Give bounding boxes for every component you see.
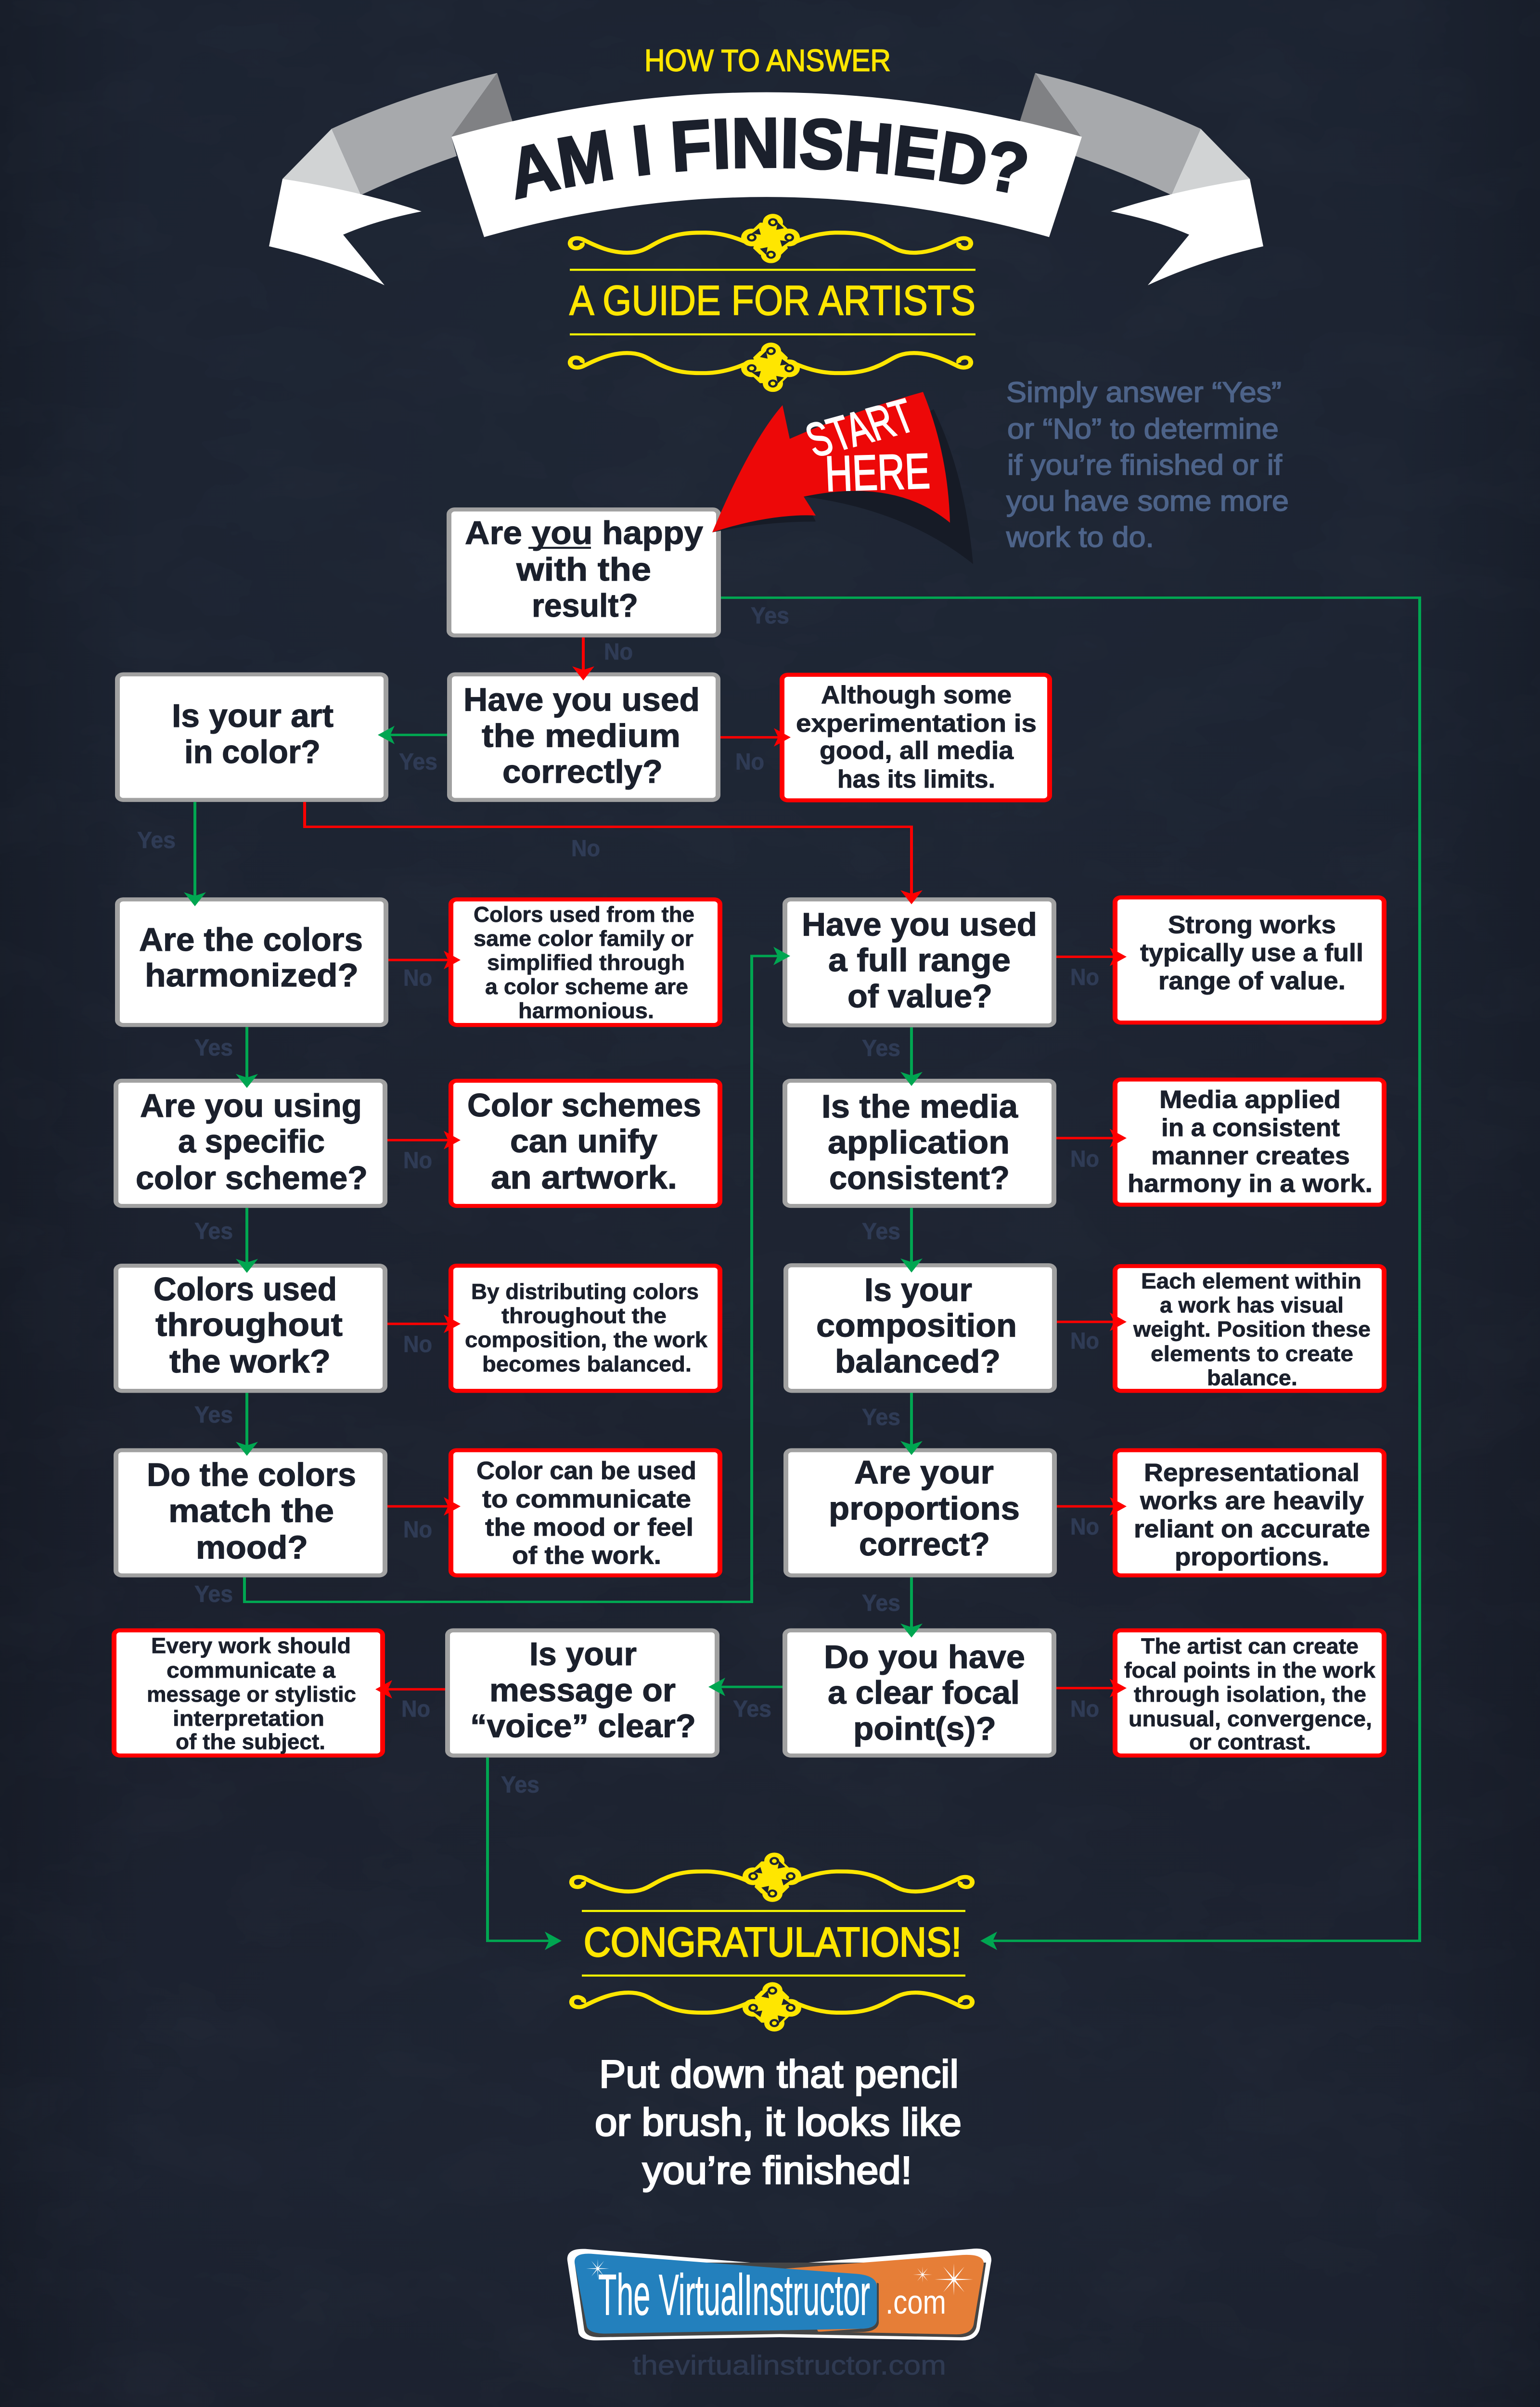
advice: media limits: Although some (821, 681, 1012, 709)
question: message or voice: Is your (529, 1636, 637, 1672)
question: composition balanced: composition (816, 1307, 1017, 1344)
question: match the mood: mood? (196, 1529, 308, 1566)
question: media application: consistent? (829, 1160, 1010, 1196)
logo suffix: .com (886, 2283, 946, 2321)
ornament: title top (570, 214, 971, 263)
question: specific color scheme (116, 1081, 385, 1206)
advice: representational: proportions. (1175, 1543, 1329, 1571)
question: specific color scheme: a specific (178, 1124, 325, 1160)
advice: focal points: The artist can create (1141, 1634, 1359, 1658)
yes and no branch labels: No (1070, 1328, 1099, 1354)
question: match the mood: Do the colors (147, 1457, 356, 1493)
question: composition balanced: balanced? (835, 1343, 1001, 1379)
arrow: value yes (900, 1027, 923, 1086)
closing message: or brush, it looks like (595, 2100, 962, 2144)
question: colors harmonized: Are the colors (139, 921, 363, 958)
advice: color schemes (451, 1081, 720, 1206)
question: full range of value: Have you used (802, 906, 1037, 943)
arrow: color yes to harmonized (184, 802, 206, 906)
ornament: congratulations bottom (572, 1982, 972, 2032)
arrow: throughout yes (236, 1393, 258, 1456)
advice: mood (451, 1450, 720, 1575)
advice: mood: to communicate (482, 1485, 691, 1513)
ribbon: right tail (1020, 73, 1263, 285)
question: colors throughout (116, 1266, 385, 1391)
arrow: voice no (375, 1680, 445, 1698)
arrow: value no (1056, 947, 1127, 966)
yes and no branch labels: No (735, 749, 764, 775)
advice: media applied: in a consistent (1161, 1114, 1340, 1142)
question: match the mood: match the (168, 1493, 334, 1529)
question: composition balanced (786, 1265, 1054, 1391)
heading: how to answer: HOW TO ANSWER (644, 43, 891, 78)
advice: visual weight: a work has visual (1160, 1293, 1344, 1318)
advice: color schemes: Color schemes (467, 1087, 701, 1124)
logo: the virtual instructor (567, 2249, 991, 2341)
yes and no branch labels: No (403, 965, 432, 991)
advice: distributing colors: throughout the (501, 1304, 667, 1328)
question: proportions (786, 1450, 1054, 1575)
question: happy with result: Are you happy (465, 515, 704, 551)
arrow: harmonized no (388, 951, 461, 969)
arrow: scheme yes (236, 1208, 258, 1273)
yes and no branch labels: Yes (751, 603, 789, 629)
question: focal points: point(s)? (853, 1711, 996, 1747)
advice: color family: same color family or (474, 926, 693, 951)
yes and no branch labels: No (403, 1517, 432, 1542)
advice: color family: simplified through (487, 950, 685, 975)
yes and no branch labels: No (401, 1696, 430, 1722)
congratulations heading with rules (582, 1910, 965, 1977)
yes and no branch labels: Yes (194, 1218, 233, 1244)
arrow: proportions no (1057, 1497, 1127, 1515)
title: AM I FINISHED? (515, 117, 1027, 200)
question: focal points: a clear focal (828, 1675, 1020, 1711)
arrow: focal yes to voice (708, 1678, 783, 1696)
yes and no branch labels: Yes (862, 1219, 900, 1244)
arrow: medium no to advice (720, 728, 791, 747)
advice: message (114, 1631, 383, 1756)
yes and no branch labels: Yes (399, 749, 437, 775)
arrow: composition no (1057, 1313, 1127, 1331)
advice: representational: Representational (1144, 1459, 1360, 1487)
question: art in color (117, 674, 386, 800)
question: proportions: correct? (859, 1526, 990, 1562)
yes and no branch labels: No (1070, 1514, 1099, 1540)
question: match the mood (116, 1450, 385, 1575)
yes and no branch labels: Yes (862, 1035, 900, 1061)
advice: message: Every work should (151, 1633, 351, 1658)
question: colors harmonized (117, 899, 386, 1025)
question: full range of value: a full range (828, 942, 1011, 978)
advice: distributing colors: composition, the work (465, 1328, 707, 1352)
advice: message: interpretation (173, 1706, 324, 1731)
yes and no branch labels: No (403, 1332, 432, 1357)
advice: strong works (1115, 897, 1384, 1022)
closing message: Put down that pencil (599, 2052, 959, 2096)
arrow: scheme no (387, 1131, 461, 1150)
arrow: media yes (900, 1208, 923, 1272)
yes and no branch labels: No (1070, 1146, 1099, 1172)
advice: media limits (782, 675, 1050, 800)
logo: the virtual instructor: The VirtualInstructor (598, 2263, 870, 2328)
question: proportions: proportions (829, 1490, 1020, 1527)
question: medium correctly: correctly? (502, 753, 663, 789)
question: medium correctly: Have you used (463, 682, 700, 718)
yes and no branch labels: Yes (194, 1035, 233, 1061)
advice: color schemes: an artwork. (491, 1160, 677, 1196)
yes and no branch labels: No (1070, 1696, 1099, 1722)
instructions text: Simply answer “Yes” (1006, 376, 1282, 408)
ornament: congratulations top (572, 1852, 972, 1902)
question: proportions: Are your (854, 1454, 994, 1490)
advice: message: communicate a (167, 1658, 335, 1682)
arrow: voice yes to congratulations (488, 1758, 562, 1950)
question: happy with result (449, 509, 719, 635)
arrow: color no to full range (305, 802, 923, 904)
advice: representational (1115, 1450, 1384, 1575)
ornament: title bottom (570, 343, 971, 392)
advice: focal points: focal points in the work (1124, 1658, 1375, 1682)
advice: distributing colors (451, 1266, 720, 1391)
question: medium correctly (449, 674, 718, 800)
advice: representational: works are heavily (1140, 1487, 1364, 1515)
arrow: mood no (387, 1497, 461, 1515)
arrow: happy no to medium (572, 637, 594, 680)
ribbon: centre band (451, 92, 1082, 237)
question: message or voice: “voice” clear? (470, 1708, 696, 1744)
yes and no branch labels: Yes (733, 1696, 771, 1722)
arrow: focal no (1056, 1679, 1127, 1697)
label: start: START (798, 389, 922, 467)
advice: visual weight: weight. Position these (1133, 1317, 1371, 1342)
ribbon: left tail (269, 73, 513, 285)
advice: message: of the subject. (176, 1730, 325, 1754)
website url: thevirtualinstructor.com (632, 2350, 946, 2381)
advice: focal points (1115, 1631, 1384, 1756)
yes and no branch labels (137, 603, 1099, 1798)
question: art in color: Is your art (172, 698, 334, 734)
question: full range of value (785, 899, 1054, 1025)
advice: focal points: through isolation, the (1134, 1682, 1366, 1707)
question: message or voice (448, 1631, 717, 1756)
question: colors harmonized: harmonized? (145, 958, 359, 994)
advice: color family: Colors used from the (474, 902, 694, 927)
yes and no branch labels: Yes (501, 1772, 539, 1798)
instructions text: work to do. (1006, 521, 1154, 553)
arrow: media no (1056, 1129, 1127, 1147)
advice: color schemes: can unify (510, 1123, 657, 1159)
instructions text: if you’re finished or if (1007, 449, 1283, 481)
advice: color family: a color scheme are (485, 974, 688, 999)
question: focal points (785, 1631, 1054, 1756)
advice: visual weight (1115, 1266, 1384, 1391)
arrow: mood yes to full range (244, 947, 790, 1602)
question: specific color scheme: Are you using (140, 1087, 362, 1124)
question: media application: application (828, 1124, 1010, 1160)
arrow: throughout no (387, 1315, 461, 1333)
advice: media applied: Media applied (1159, 1086, 1341, 1113)
advice: media applied (1115, 1079, 1384, 1204)
arrow: composition yes (900, 1393, 923, 1455)
yes and no branch labels: No (604, 639, 633, 665)
closing message (595, 2052, 962, 2192)
advice: strong works: typically use a full (1140, 939, 1363, 967)
instructions text: or “No” to determine (1007, 413, 1279, 445)
advice: representational: reliant on accurate (1134, 1515, 1370, 1543)
yes and no branch labels: Yes (194, 1402, 233, 1428)
question: colors throughout: Colors used (154, 1271, 337, 1307)
advice: mood: Color can be used (476, 1457, 696, 1485)
advice: distributing colors: becomes balanced. (482, 1352, 692, 1376)
question: composition balanced: Is your (864, 1272, 972, 1308)
advice: visual weight: Each element within (1141, 1269, 1361, 1294)
advice: focal points: unusual, convergence, (1129, 1707, 1372, 1731)
advice: media limits: good, all media (820, 737, 1014, 764)
advice: media limits: experimentation is (796, 710, 1037, 738)
arrow: harmonized yes (236, 1027, 258, 1088)
advice: visual weight: balance. (1207, 1366, 1297, 1390)
label: here: HERE (824, 443, 931, 502)
question: colors throughout: the work? (169, 1343, 331, 1379)
advice: message: message or stylistic (147, 1682, 356, 1707)
question: media application (785, 1081, 1054, 1206)
question: medium correctly: the medium (482, 718, 680, 754)
congratulations text: CONGRATULATIONS! (584, 1919, 962, 1965)
yes and no branch labels: Yes (137, 828, 176, 854)
advice: strong works: Strong works (1168, 911, 1336, 939)
subtitle text: A GUIDE FOR ARTISTS (569, 277, 975, 324)
advice: mood: of the work. (512, 1541, 661, 1569)
question: media application: Is the media (821, 1088, 1018, 1125)
advice: distributing colors: By distributing colors (471, 1280, 699, 1304)
advice: visual weight: elements to create (1151, 1342, 1353, 1366)
advice: media applied: manner creates (1151, 1142, 1350, 1170)
arrow: proportions yes (900, 1578, 923, 1638)
yes and no branch labels: No (1070, 964, 1099, 990)
question: happy with result: with the (516, 551, 651, 587)
yes and no branch labels: No (571, 836, 600, 861)
advice: color family: harmonious. (518, 998, 654, 1023)
question: colors throughout: throughout (155, 1307, 343, 1343)
question: full range of value: of value? (847, 978, 992, 1014)
yes and no branch labels: Yes (194, 1581, 233, 1607)
advice: media limits: has its limits. (837, 765, 995, 793)
question: specific color scheme: color scheme? (136, 1160, 368, 1196)
closing message: you’re finished! (642, 2148, 912, 2192)
arrow: medium yes to art in color (378, 726, 447, 744)
icon: start here arrow (712, 389, 973, 564)
instructions text: you have some more (1006, 485, 1289, 517)
instructions text (1006, 376, 1289, 553)
advice: color family (451, 899, 720, 1025)
ribbon banner with title (269, 73, 1263, 285)
question: happy with result: result? (532, 587, 638, 623)
yes and no branch labels: No (403, 1148, 432, 1174)
subtitle with rules (569, 269, 975, 336)
question: focal points: Do you have (824, 1639, 1025, 1675)
advice: focal points: or contrast. (1189, 1730, 1311, 1754)
question: message or voice: message or (489, 1672, 676, 1708)
yes and no branch labels: Yes (862, 1404, 900, 1430)
advice: strong works: range of value. (1158, 967, 1346, 995)
question: art in color: in color? (184, 734, 321, 770)
yes and no branch labels: Yes (862, 1590, 900, 1616)
icon: stars (586, 2259, 973, 2295)
advice: mood: the mood or feel (485, 1514, 693, 1541)
arrow: happy yes to congratulations (721, 598, 1420, 1950)
advice: media applied: harmony in a work. (1128, 1170, 1373, 1198)
